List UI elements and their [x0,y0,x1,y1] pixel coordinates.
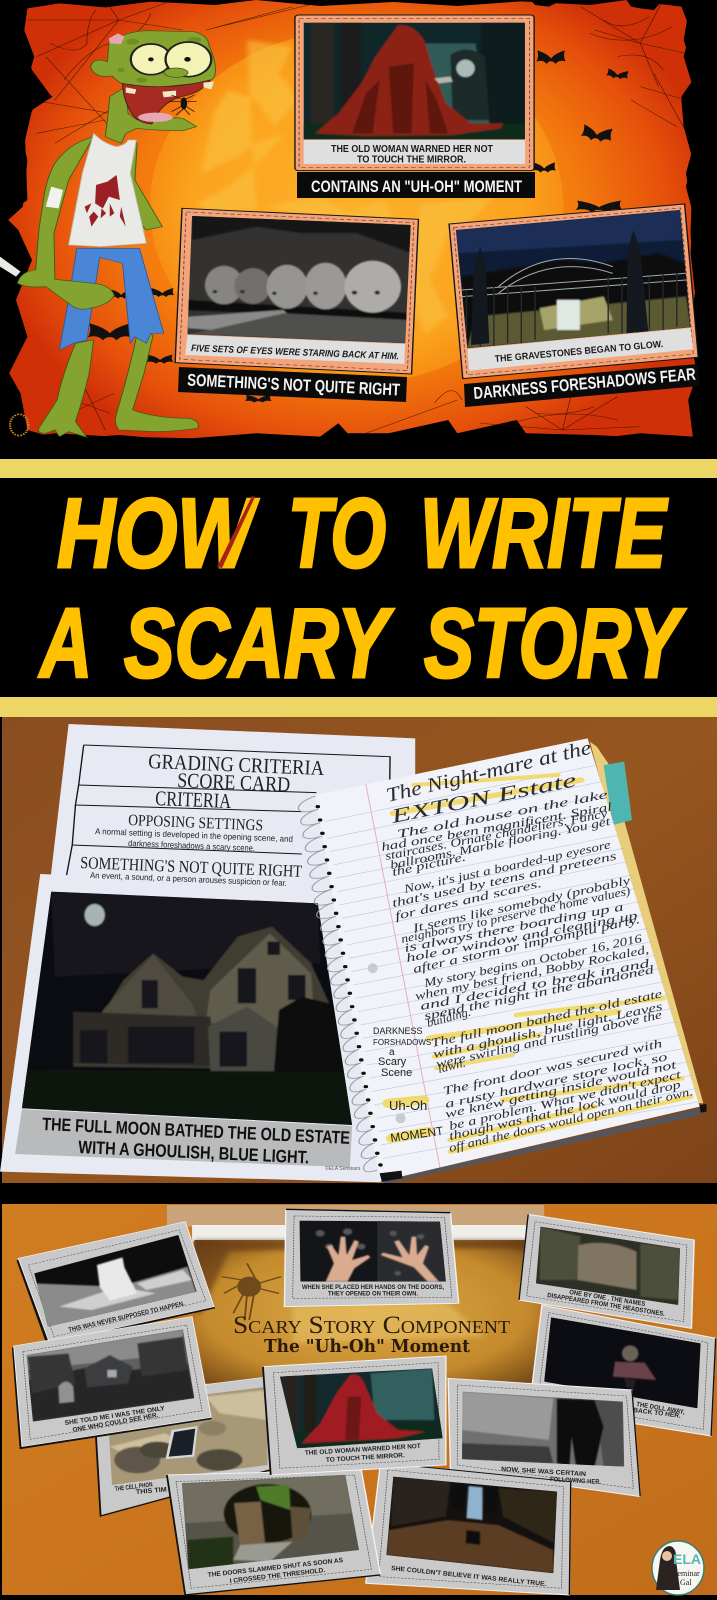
nose [164,68,188,77]
caption text: TO TOUCH THE MIRROR. [357,154,466,166]
pupils [148,57,191,62]
front handout paper [0,874,389,1183]
notebook handwritten story [380,787,694,1155]
notebook handwritten story: and I decided to break in and [419,956,652,1013]
margin notes: Scene [381,1067,412,1079]
card captions: ONE BY ONE , THE NAMES [569,1289,646,1308]
score card text: GRADING CRITERIA [148,749,325,780]
score card text: SOMETHING'S NOT QUITE RIGHT [80,853,303,881]
notebook handwritten story: The full moon bathed the old estate [430,986,664,1050]
card: phone in sand [94,1377,274,1516]
title: how to write a scary story: HOW [57,478,259,588]
notebook handwritten story: be a problem. What we didn't expect [448,1067,683,1133]
caption text: FIVE SETS OF EYES WERE STARING BACK AT HIM. [191,343,399,362]
zombie neck and jaw [105,87,197,143]
card captions: TO TOUCH THE MIRROR. [326,1452,405,1464]
notebook handwritten story: when my best friend, Bobby Rockaled, [414,942,650,1003]
score card text: CRITERIA [155,786,232,813]
card: red cloak [263,1356,446,1475]
photo card: something's not quite right [175,208,418,374]
card: woman in leaves [366,1463,571,1595]
zombie shirt [69,133,146,247]
label: something's not quite right: SOMETHING'S NOT QUITE RIGHT [187,371,401,400]
card: running figure [448,1378,640,1497]
cobwebs [27,0,691,433]
photo: red cloak in the forest [304,23,525,139]
binder clip [380,1171,402,1182]
card captions: ONE WHO COULD SEE HER. [72,1412,159,1434]
label: contains an uh-oh moment: CONTAINS AN "UH-OH" MOMENT [311,177,522,196]
title: how to write a scary story: A [38,588,92,698]
notebook handwritten story: though was that the lock would drop [448,1077,682,1143]
orange grunge backdrop [8,0,697,441]
notebook handwritten story: building. [425,1005,472,1030]
notebook handwritten story: is always there boarding up a [403,899,625,955]
notebook handwritten story: that's used by teens and preteens [391,849,618,910]
score card grid [66,745,390,877]
poster text: Scary Story Component [233,1312,510,1339]
spiral binding [298,796,377,1172]
margin notes: a [389,1047,395,1058]
notebook handwritten story: were swirling and rustling above the [435,1007,664,1071]
card captions: THE OLD WOMAN WARNED HER NOT [305,1443,421,1457]
notebook handwritten story: spend the night in the abandoned [423,962,656,1023]
title: how to write a scary story [38,478,686,698]
notebook handwritten story: lawn. [436,1056,467,1076]
notebook margin line [366,784,440,1167]
spider on poster [222,1263,281,1320]
punch holes [368,963,378,973]
folder back [167,1205,544,1227]
wood table [2,717,717,1183]
card: doll [530,1305,716,1436]
bats [88,50,629,403]
card captions: THE DOLL AWAY, [636,1401,685,1416]
poster mottling [194,1240,537,1343]
card: jar [16,1222,215,1346]
hand with weapon [0,257,21,277]
dark grunge edge blotches [0,0,717,480]
card captions: THIS TIM [136,1486,167,1496]
card captions: DISAPPEARED FROM THE HEADSTONES. [547,1292,665,1318]
notebook page [316,738,700,1182]
margin notes: Scary [378,1056,407,1068]
moon [150,30,563,383]
logo: ELA Seminar Gal [652,1541,704,1595]
notebook handwritten story: with a ghoulish, blue light. Leaves [432,999,664,1061]
folder white strip [192,1225,526,1242]
panel: notebook on wood table [0,717,717,1183]
card: ghost house [12,1317,212,1449]
yellow highlights [389,775,691,1152]
blood stains [85,175,126,227]
zombie character [0,31,215,437]
photo: haunted house [18,890,357,1127]
notebook handwritten story: neighbors try to preserve the home values) [400,884,632,946]
caption text: THE GRAVESTONES BEGAN TO GLOW. [494,339,664,365]
grading criteria paper [50,724,415,890]
handout caption text: WITH A GHOULISH, BLUE LIGHT. [78,1137,309,1167]
red streak on title [217,496,255,568]
score card text: A normal setting is developed in the opening scene, and [95,826,293,844]
notebook handwritten story: after a storm or impromptu party. [412,912,641,976]
yellow folder edge [590,742,703,1103]
panel: story component cards on wood table [2,1204,717,1595]
margin notes: Uh-Oh [389,1098,427,1113]
photo: cemetery gate [453,208,695,352]
score card text: OPPOSING SETTINGS [128,812,263,834]
card captions: THE CELL PHON [114,1481,153,1493]
card captions: WHEN SHE PLACED HER HANDS ON THE DOORS, [302,1284,444,1291]
score card text [80,749,325,888]
poster shadow [194,1313,222,1383]
doodle stamp [10,414,28,436]
notebook handwritten story: My story begins on October 16, 2016 [422,931,643,990]
zombie pants [59,248,164,350]
moon blotches [197,40,494,333]
tongue [138,113,173,122]
poster [194,1240,537,1383]
photo card: uh-oh moment [295,15,534,171]
logo: ELA Seminar Gal: Gal [680,1578,692,1587]
handout caption strip [15,1109,352,1167]
label: contains an uh-oh moment [297,172,535,198]
zombie head [91,31,215,89]
card captions: I CROSSED THE THRESHOLD. [229,1567,326,1585]
zombie bandage [46,187,63,208]
notebook handwritten story: the picture. [391,850,467,879]
card captions: BACK TO HER. [633,1407,681,1420]
score card text: darkness foreshadows a scary scene. [128,838,255,853]
notebook handwritten story: hole or window and cleaning up [405,908,639,965]
notebook handwritten story: The old house on the lake [396,787,610,841]
card captions: THEY OPENED ON THEIR OWN. [328,1290,418,1298]
photo: doll heads [183,213,416,347]
card captions: NOW, SHE WAS CERTAIN [501,1466,586,1478]
caption strip [467,328,693,371]
head spots [118,37,201,83]
margin notes: DARKNESS [373,1026,423,1036]
card: hands on doors [284,1209,459,1307]
poster text [233,1312,510,1357]
notebook handwritten story: we knew getting inside would not [444,1057,678,1121]
notebook handwritten story: The front door was secured with [442,1036,663,1098]
poster text: The "Uh-Oh" Moment [264,1336,471,1357]
notebook handwritten story: for dares and scares. [394,876,543,923]
notebook handwritten story: staircases. Ornate chandeliers. Fancy [384,806,609,863]
margin notes: FORSHADOWS [373,1038,431,1047]
logo: ELA Seminar Gal: Seminar [673,1569,700,1578]
exposed brain [109,33,124,44]
zombie front arm [126,140,162,230]
notebook handwritten story: ballrooms. Marble flooring. You get [389,814,612,872]
notebook handwritten story: a rusty hardware store lock, so [444,1049,669,1111]
card captions: THIS WAS NEVER SUPPOSED TO HAPPEN. [68,1300,186,1334]
caption text: THE OLD WOMAN WARNED HER NOT [331,144,493,155]
eyes [131,42,211,77]
notebook handwritten story: off and the doors would open on their own. [447,1084,694,1155]
wood table [2,1204,717,1595]
card captions: FOLLOWING HER. [550,1476,601,1486]
card: round doorway [167,1470,380,1595]
notebook handwritten story: Now, it's just a boarded-up eyesore [401,837,613,896]
notebook title: The Night-mare at the [384,737,594,807]
title: how to write a scary story: SCARY [124,588,394,698]
notebook rule lines [325,765,700,1158]
spider [169,95,197,115]
card captions: SHE COULDN'T BELIEVE IT WAS REALLY TRUE. [391,1565,547,1588]
score card text: SCORE CARD [177,768,291,797]
teal tab [604,762,632,825]
caption text [331,144,493,166]
card: headstone [519,1214,694,1328]
card captions: SHE TOLD ME I WAS THE ONLY [64,1405,166,1427]
top yellow band [0,459,717,478]
margin notes [373,1026,445,1145]
score card text: An event, a sound, or a person arouses suspicion or fear. [90,870,287,888]
teeth [126,82,214,97]
card captions [64,1284,685,1588]
photo card: darkness foreshadows fear [449,204,698,379]
handout caption text [42,1114,361,1172]
notebook handwritten story: It seems like somebody (probably [410,873,632,935]
handout caption text: THE FULL MOON BATHED THE OLD ESTATE [42,1114,350,1148]
notebook title [384,737,594,828]
handout caption text: ©ELA Seminars [325,1165,361,1172]
panel: halloween scene [0,0,700,438]
logo: ELA Seminar Gal: ELA [673,1551,701,1567]
notebook title: EXTON Estate [388,769,578,828]
zombie back arm [17,137,114,309]
title: how to write a scary story: TO [288,478,386,588]
under-sheets shadow [380,1108,702,1183]
zombie mouth [123,80,210,124]
bottom yellow band [0,697,717,717]
caption strip [304,140,525,164]
notebook handwritten story: had once been magnificent. Spiral [380,799,614,854]
caption strip [185,335,405,364]
card captions: THE DOORS SLAMMED SHUT AS SOON AS [207,1557,344,1579]
margin notes: MOMENT [389,1124,445,1145]
zombie legs [38,333,198,437]
